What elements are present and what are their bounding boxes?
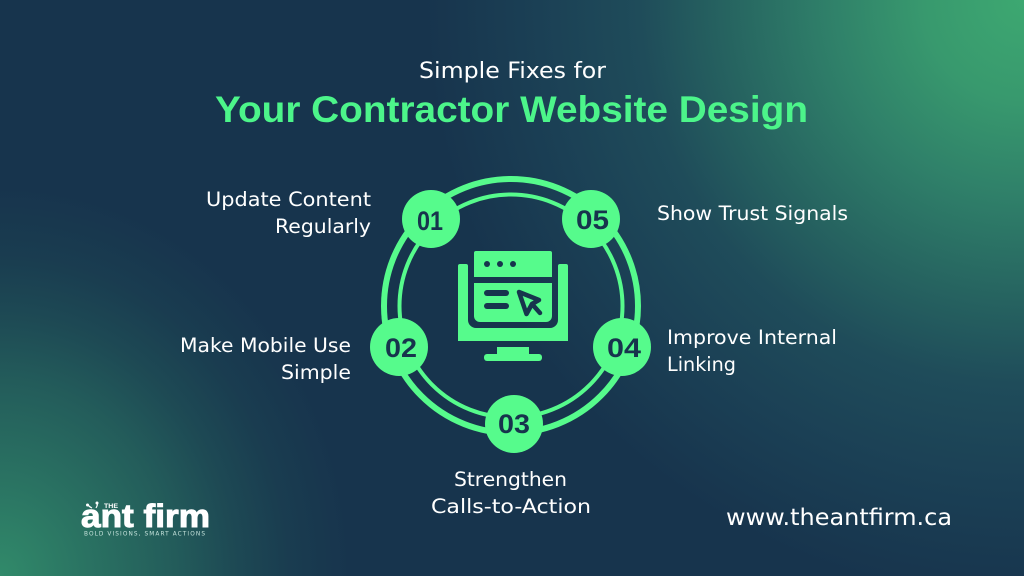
step 02: [370, 318, 428, 376]
label: make mobile use simple: Make Mobile Use: [180, 334, 351, 357]
logo: ant firm: [81, 498, 210, 534]
step 05: [562, 190, 620, 248]
step 04: [593, 318, 651, 376]
step 01: 01: [417, 206, 443, 236]
label: improve internal linking: Improve Internal: [667, 326, 837, 349]
label: show trust signals: Show Trust Signals: [657, 202, 848, 225]
label: update content regularly: Regularly: [275, 215, 371, 238]
title: Your Contractor Website Design: [215, 89, 808, 130]
website url: www.theantfirm.ca: [726, 505, 952, 531]
label: make mobile use simple: Simple: [281, 361, 351, 384]
label: improve internal linking: [667, 326, 837, 376]
cycle diagram: [370, 179, 651, 453]
label: strengthen calls-to-action: Calls-to-Action: [431, 495, 591, 518]
step 05: 05: [576, 205, 609, 235]
label: strengthen calls-to-action: [431, 468, 591, 518]
label: improve internal linking: Linking: [667, 353, 736, 376]
icon: monitor with browser window and cursor: [458, 251, 568, 361]
logo: THE: [104, 503, 119, 510]
double ring: [384, 179, 638, 433]
step 03: 03: [498, 409, 530, 439]
label: update content regularly: [206, 188, 371, 238]
step 01: [402, 190, 460, 248]
step 03: [485, 395, 543, 453]
label: strengthen calls-to-action: Strengthen: [454, 468, 567, 491]
logo: BOLD VISIONS, SMART ACTIONS: [84, 532, 205, 538]
step 02: 02: [385, 333, 417, 363]
title: [215, 58, 808, 130]
step 04: 04: [607, 333, 641, 363]
title: Simple Fixes for: [419, 58, 607, 84]
label: make mobile use simple: [180, 334, 351, 384]
label: update content regularly: Update Content: [206, 188, 371, 211]
